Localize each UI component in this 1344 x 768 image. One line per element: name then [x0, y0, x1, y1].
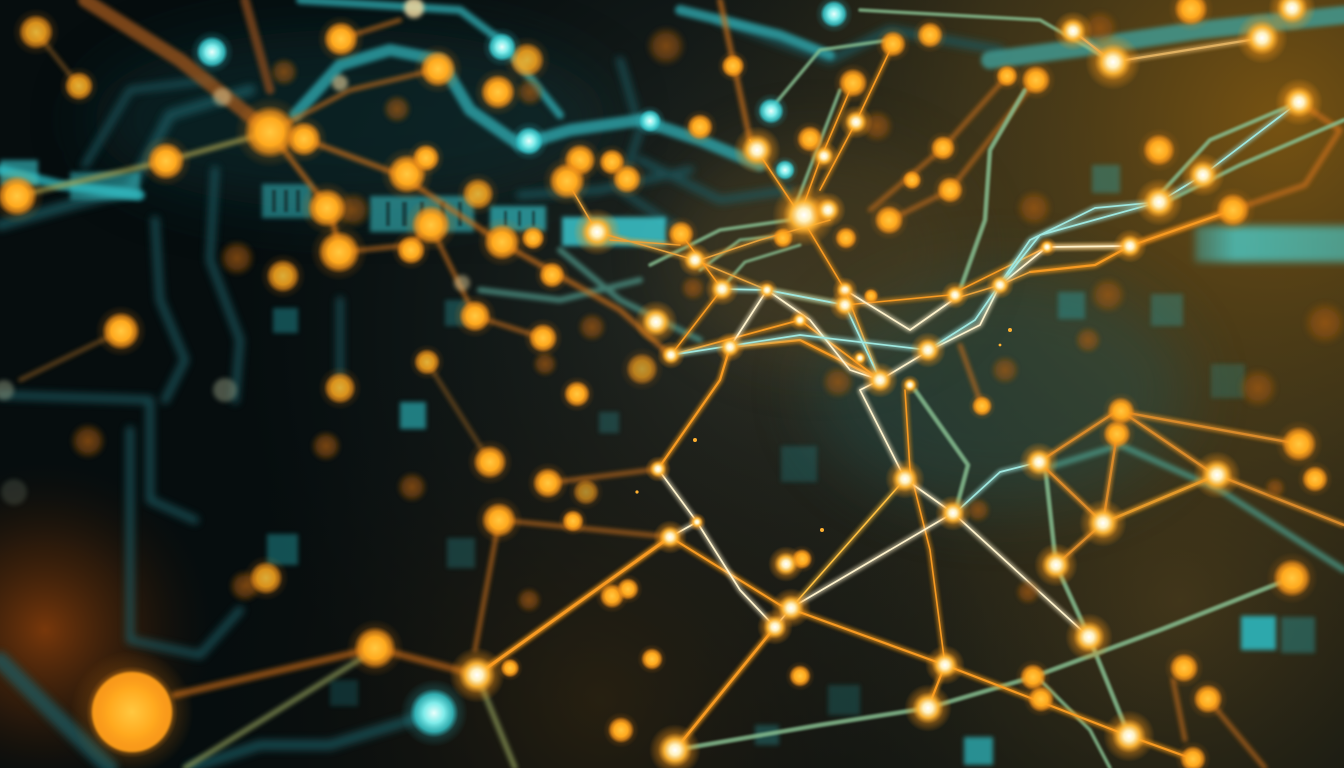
blurred cyan circuit traces: [0, 0, 1344, 570]
bright teal links: [671, 102, 1299, 513]
dim background nodes: [68, 8, 1344, 614]
dim pale nodes: [0, 378, 237, 505]
spark particles: [635, 328, 1012, 532]
blurred dark teal circuit traces: [0, 20, 1000, 768]
cyan squares: [267, 165, 1315, 765]
bright white-hot nodes: [449, 0, 1323, 768]
bright orange links: [477, 31, 1344, 759]
pale nodes: [213, 0, 470, 291]
blurred cyan bar right: [1195, 226, 1344, 262]
soft green links: [650, 10, 1344, 768]
data bar stripes: [272, 190, 535, 226]
large out of focus orb: [92, 672, 172, 752]
bright white links: [658, 246, 1130, 637]
blurred cyan data bars: [0, 160, 666, 246]
teal nodes: [190, 0, 853, 747]
